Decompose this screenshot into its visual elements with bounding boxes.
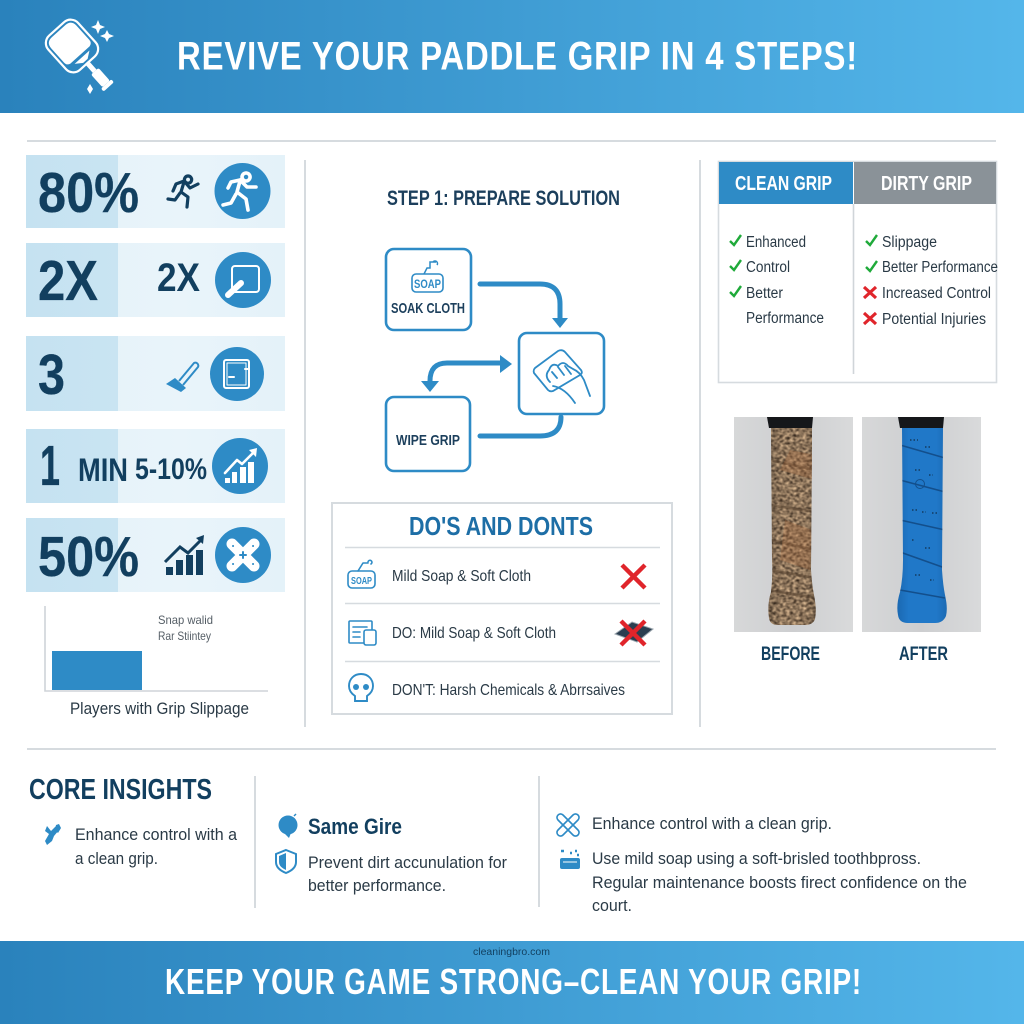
text: prevent dirt: Prevent dirt accunulation for xyxy=(308,853,507,872)
footer banner xyxy=(0,941,1024,1024)
panel: key statistics xyxy=(26,155,285,718)
column: clean grip: Enhanced xyxy=(746,234,806,251)
stat row: 1 min, 5-10% xyxy=(26,429,285,503)
text: prevent dirt: better performance. xyxy=(308,876,446,895)
column: dirty grip xyxy=(864,173,998,328)
row: do xyxy=(349,621,653,645)
text: enhance control: Enhance control with a xyxy=(75,825,238,844)
label: before: BEFORE xyxy=(761,644,820,665)
box: soak cloth: SOAP xyxy=(414,277,441,291)
text: maintenance tips: court. xyxy=(592,896,632,915)
column: dirty grip: DIRTY GRIP xyxy=(881,173,972,195)
heading: DO'S AND DONTS xyxy=(409,511,593,541)
stat row: 1 min, 5-10%: 1 xyxy=(40,434,60,498)
stat row: 2X: 2X xyxy=(38,249,98,313)
panel: same grip insight xyxy=(276,814,507,895)
stat row: 1 min, 5-10%: 5-10% xyxy=(135,453,207,486)
text: maintenance tips: Regular maintenance boosts firect confidence on the xyxy=(592,873,967,892)
heading: same gire: Same Gire xyxy=(308,814,402,839)
photo: clean grip after xyxy=(862,417,981,632)
box: soak cloth xyxy=(386,249,471,330)
text: enhance control xyxy=(75,825,238,868)
stat row: 80%: 80% xyxy=(38,161,139,225)
stat row: 50% xyxy=(26,518,285,592)
row: do: DO: Mild Soap & Soft Cloth xyxy=(392,625,556,642)
icon: control xyxy=(45,824,61,845)
column: dirty grip: Increased Control xyxy=(882,285,991,302)
box: cloth and hand xyxy=(519,333,604,414)
stat row: 80% xyxy=(26,155,285,228)
text: enhance control: a clean grip. xyxy=(75,849,158,868)
icon: shield xyxy=(276,850,296,873)
box: wipe grip xyxy=(386,397,470,471)
row: don't: DON'T: Harsh Chemicals & Abrrsaives xyxy=(392,682,625,699)
text: prevent dirt xyxy=(308,853,507,895)
panel: step flow diagram xyxy=(386,187,620,471)
arrow: cloth to wipe xyxy=(421,355,512,392)
stat row: 50%: 50% xyxy=(38,525,139,589)
row: mild soap: Mild Soap & Soft Cloth xyxy=(392,568,531,585)
photo: dirty grip before xyxy=(734,417,853,632)
text: maintenance tips xyxy=(592,849,967,915)
stat row: 2X xyxy=(26,243,285,317)
heading: core insights: CORE INSIGHTS xyxy=(29,774,212,806)
row: don't xyxy=(349,674,625,701)
heading: step 1: STEP 1: PREPARE SOLUTION xyxy=(387,187,620,210)
column: dirty grip: Better Performance xyxy=(882,259,998,276)
icon: bandage xyxy=(557,814,579,836)
icon: pickleball paddle with sparkles xyxy=(42,16,124,100)
icon: paddle balloon xyxy=(278,814,298,838)
bar chart: players with grip slippage: Players with Grip Slippage xyxy=(70,699,249,718)
icon: soap bubbles xyxy=(560,851,580,869)
stat row: 3: 3 xyxy=(38,343,65,407)
box: soak cloth: SOAK CLOTH xyxy=(391,300,465,317)
text: enhance control: Enhance control with a clean grip. xyxy=(592,814,832,833)
column: dirty grip: Slippage xyxy=(882,234,937,251)
source credit: cleaningbro.com xyxy=(473,947,550,958)
stat row: 1 min, 5-10%: MIN xyxy=(78,452,128,488)
text: maintenance tips: Use mild soap using a soft-brisled toothbpross. xyxy=(592,849,921,868)
panel: maintenance insight xyxy=(557,814,967,915)
panel: clean vs dirty table xyxy=(718,162,998,382)
header banner xyxy=(0,0,1024,113)
column: clean grip: Performance xyxy=(746,310,824,327)
title: REVIVE YOUR PADDLE GRIP IN 4 STEPS! xyxy=(177,34,858,78)
column: dirty grip: Potential Injuries xyxy=(882,311,986,328)
box: wipe grip: WIPE GRIP xyxy=(396,432,460,449)
arrow: wipe to cloth xyxy=(480,417,561,436)
bar chart: players with grip slippage: Rar Stiintey xyxy=(158,629,211,643)
row: mild soap: SOAP xyxy=(351,576,372,587)
bar chart: players with grip slippage: Snap walid xyxy=(158,613,213,627)
row: mild soap xyxy=(348,560,645,588)
panel: do's and don'ts xyxy=(332,503,672,714)
arrow: soak to cloth xyxy=(480,284,568,328)
panel: core insights xyxy=(29,774,238,868)
label: after: AFTER xyxy=(899,644,948,665)
column: clean grip: Control xyxy=(746,259,790,276)
bar chart: players with grip slippage xyxy=(45,606,268,718)
stat row: 3 xyxy=(26,336,285,411)
stat row: 2X: 2X xyxy=(157,256,200,300)
column: clean grip: CLEAN GRIP xyxy=(735,173,832,195)
column: clean grip: Better xyxy=(746,285,783,302)
column: clean grip xyxy=(730,173,832,327)
